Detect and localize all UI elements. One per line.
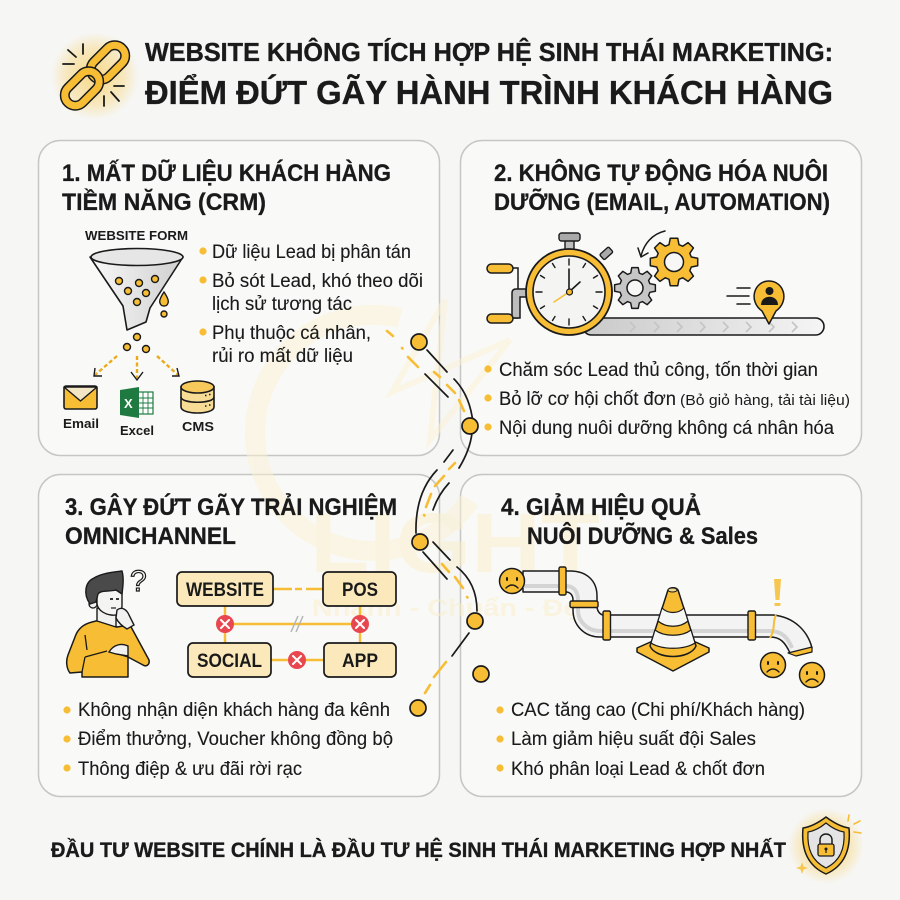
panel 1 heading: TIỀM NĂNG (CRM) [62, 188, 266, 216]
panel 2 heading: 2. KHÔNG TỰ ĐỘNG HÓA NUÔI [494, 159, 828, 187]
panel 2 heading [494, 159, 830, 216]
icon: broken pipeline [523, 567, 812, 656]
icon: confused person: ? [130, 565, 147, 598]
title [145, 37, 833, 111]
box social: SOCIAL [197, 651, 262, 672]
panel 4 bullets: CAC tăng cao (Chi phí/Khách hàng) [511, 700, 805, 721]
icon: CMS database [181, 381, 214, 413]
icon: crank handle [487, 264, 530, 323]
panel 4: reduced efficiency [496, 492, 824, 780]
icon: excel [120, 387, 153, 418]
panel 3 background [38, 474, 440, 796]
road nodes [410, 334, 489, 716]
watermark logo: LIGHT [310, 496, 600, 590]
icon: sad face middle [760, 652, 786, 678]
box social [188, 643, 271, 677]
panel 2 bullets: Bỏ lỡ cơ hội chốt đơn [499, 389, 676, 410]
panel 3 heading: OMNICHANNEL [65, 523, 236, 550]
panel 1 bullets: Bỏ sót Lead, khó theo dõi [212, 271, 423, 292]
panel 2 bullets: Nội dung nuôi dưỡng không cá nhân hóa [499, 418, 834, 439]
title: ĐIỂM ĐỨT GÃY HÀNH TRÌNH KHÁCH HÀNG [145, 74, 833, 111]
panel 3 bullets: Thông điệp & ưu đãi rời rạc [78, 759, 302, 780]
icon: traffic cone [637, 588, 709, 671]
footer message: ĐẦU TƯ WEBSITE CHÍNH LÀ ĐẦU TƯ HỆ SINH THÁI MARKETING HỢP NHẤT [51, 838, 786, 862]
label CMS: CMS [182, 419, 214, 434]
watermark logo [255, 300, 600, 622]
panel 4 bullets: Làm giảm hiệu suất đội Sales [511, 729, 756, 750]
funnel label: WEBSITE FORM [85, 229, 188, 243]
panel 2 bullets: Chăm sóc Lead thủ công, tốn thời gian [499, 360, 818, 381]
panel 3 bullets [63, 700, 393, 780]
icon: sad face left [500, 568, 524, 594]
road centre dashes [387, 331, 468, 693]
icon: leaking funnel [90, 248, 183, 352]
panel 4 heading [501, 492, 758, 550]
panel 4 heading: 4. GIẢM HIỆU QUẢ [501, 492, 701, 521]
panel 1 background [38, 140, 440, 456]
box website: WEBSITE [186, 580, 264, 601]
panel 3 bullets: Không nhận diện khách hàng đa kênh [78, 700, 390, 721]
panel 3 heading [65, 492, 397, 550]
panel 1: CRM data loss [62, 159, 423, 438]
panel 2 background [460, 140, 862, 456]
road edges [416, 350, 477, 656]
icon: email [64, 386, 97, 409]
icon: gray gear [615, 268, 655, 308]
panel 3 bullets: Điểm thưởng, Voucher không đồng bộ [78, 729, 393, 750]
icon: stopwatch [526, 233, 613, 335]
panel 3: omnichannel break [63, 492, 397, 780]
icon: sad face right [800, 662, 824, 688]
panel 4 bullets [496, 700, 805, 780]
icon: excel: X [124, 396, 133, 411]
icon: lead location pin with speed lines [727, 281, 784, 324]
box website [177, 572, 273, 606]
panel 4 heading: NUÔI DƯỠNG & Sales [527, 522, 758, 550]
title: WEBSITE KHÔNG TÍCH HỢP HỆ SINH THÁI MARKETING: [145, 37, 833, 67]
box POS: POS [342, 580, 378, 601]
box app: APP [342, 651, 378, 672]
panel 1 bullets: Dữ liệu Lead bị phân tán [212, 242, 411, 263]
panel 1 bullets [199, 242, 423, 367]
panel 1 bullets: Phụ thuộc cá nhân, [212, 323, 371, 344]
broken connector lines [225, 589, 360, 660]
panel 1 bullets: rủi ro mất dữ liệu [212, 346, 353, 367]
dashed arrows to silos [94, 356, 179, 380]
label email: Email [63, 416, 99, 431]
watermark logo: Nhanh - Chuẩn - Đẹp [312, 595, 597, 622]
winding broken road [387, 331, 489, 716]
icon: exclamation [774, 579, 781, 606]
panel 4 bullets: Khó phân loại Lead & chốt đơn [511, 759, 765, 780]
label excel: Excel [120, 423, 154, 438]
icon: confused person [67, 565, 149, 677]
conveyor track [583, 318, 824, 335]
box app [324, 643, 396, 677]
channel diagram [177, 572, 396, 677]
icon: yellow gear [650, 238, 698, 286]
panel 2 heading: DƯỠNG (EMAIL, AUTOMATION) [494, 188, 830, 216]
panel 1 heading [62, 159, 391, 216]
panel 2 bullets: (Bỏ giỏ hàng, tải tài liệu) [680, 392, 850, 409]
panel 4 background [460, 474, 862, 796]
panel 1 heading: 1. MẤT DỮ LIỆU KHÁCH HÀNG [62, 159, 391, 187]
arrow: rotation [638, 231, 665, 257]
panel 2 bullets [484, 360, 850, 439]
panel 3 heading: 3. GÂY ĐỨT GÃY TRẢI NGHIỆM [65, 492, 397, 521]
box POS [323, 572, 396, 606]
red x markers [216, 615, 369, 669]
header icon: broken chain [51, 32, 139, 120]
panel 1 bullets: lịch sử tương tác [212, 294, 352, 315]
panel 2: no automation [484, 159, 850, 439]
icon: security shield [788, 808, 864, 884]
